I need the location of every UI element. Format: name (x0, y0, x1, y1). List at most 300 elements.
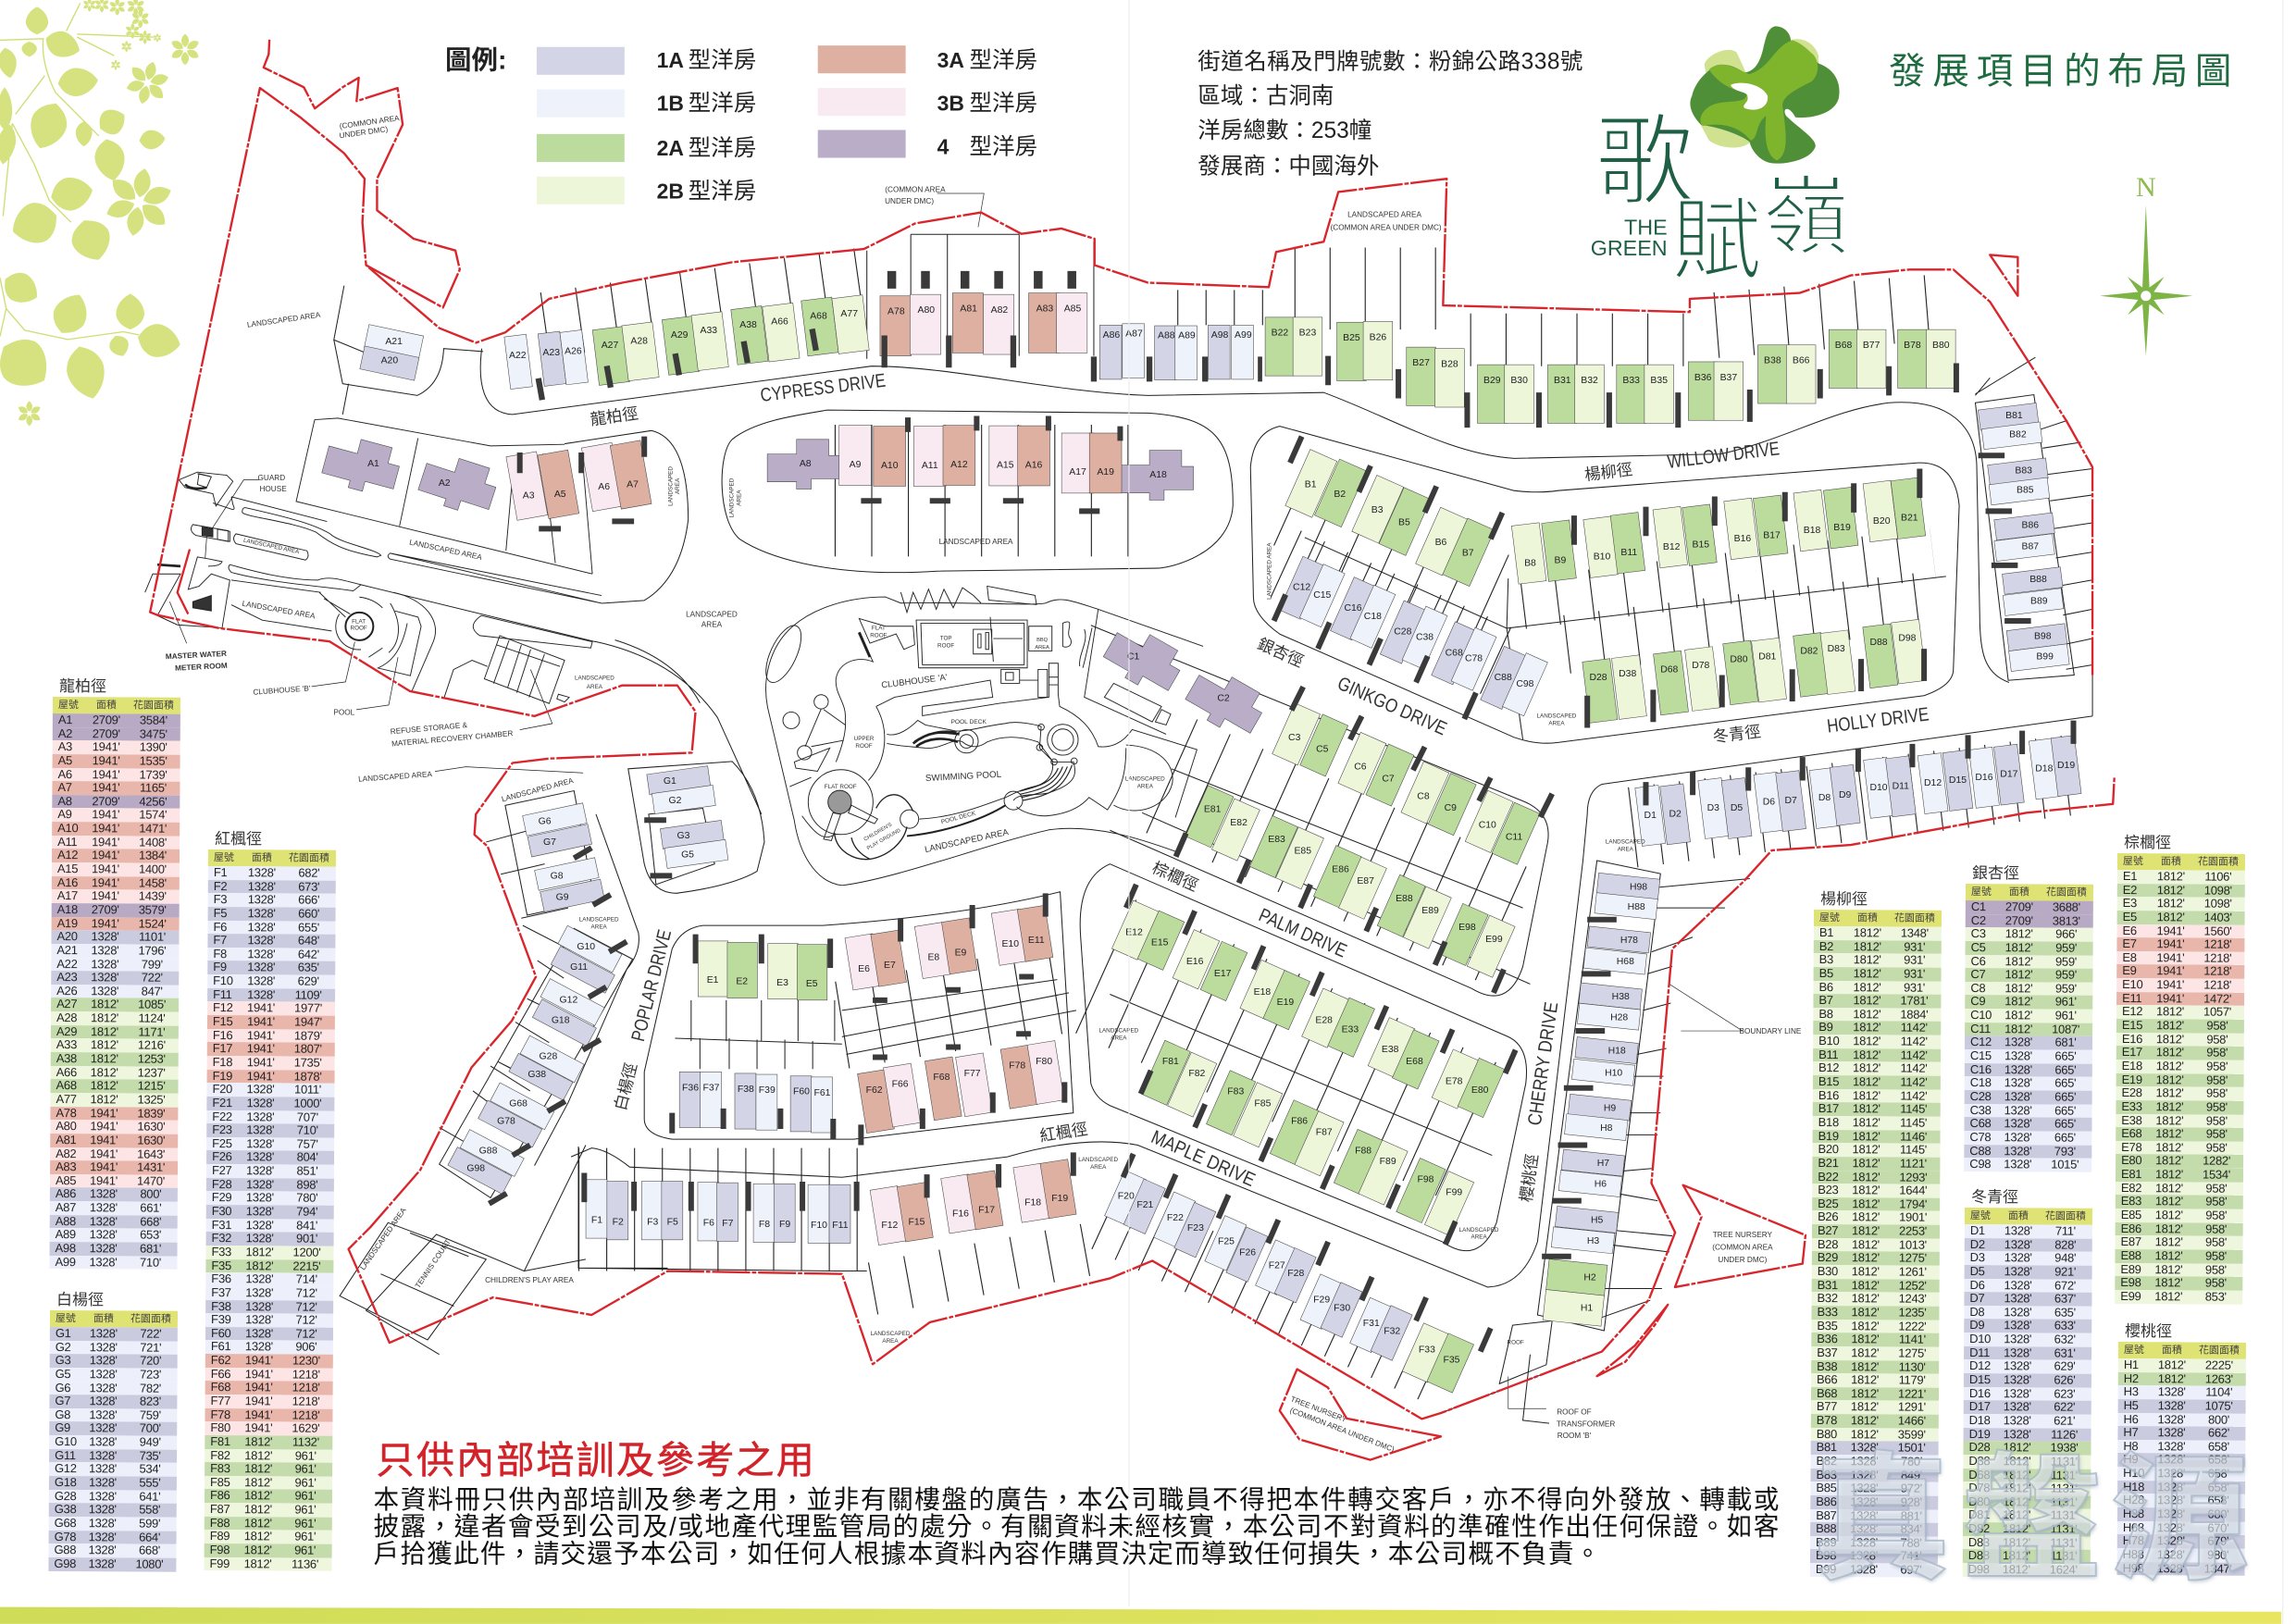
site plan text labels: AREA (591, 924, 608, 930)
table: 紅楓徑: 1328' (246, 1149, 274, 1164)
text: 紅楓徑 (215, 830, 262, 848)
table: 楊柳徑: B1 (1818, 925, 1833, 939)
table: 櫻桃徑: 1075' (2205, 1399, 2233, 1413)
table: 銀杏徑: 665' (2055, 1076, 2077, 1090)
house row: C12 to C98: C78 (1465, 654, 1483, 664)
site plan text labels: AREA (1618, 846, 1634, 852)
table: 棕櫚徑: 1812' (2157, 869, 2185, 884)
table: 龍柏徑: 1439' (138, 889, 166, 903)
page title: 發展項目的布局圖 (1889, 51, 2231, 92)
table: 冬青徑: D82 (1968, 1521, 1990, 1535)
house row: F20 to F35: F25 (1218, 1236, 1235, 1246)
house row: F12 to F19: F17 (978, 1205, 995, 1215)
site plan text labels: METER ROOM (175, 662, 228, 673)
house row: B1 to B7: B7 (1462, 549, 1474, 559)
table: 冬青徑: D16 (1969, 1385, 1991, 1399)
table: 棕櫚徑: 面積 (2161, 856, 2181, 868)
house row: F20 to F35: F22 (1167, 1213, 1184, 1223)
table: 紅楓徑: 1807' (294, 1042, 322, 1056)
table: 棕櫚徑: 1941' (2156, 991, 2184, 1005)
table: 紅楓徑: 1812' (244, 1543, 272, 1556)
house row: E81 to E99 (1185, 786, 1515, 977)
house row: B22 to B80: B27 (1412, 358, 1430, 368)
staircase blocks between house pairs (489, 279, 2073, 1352)
table: 白楊徑: 1328' (89, 1489, 117, 1503)
table: 櫻桃徑: H10 (2124, 1466, 2145, 1481)
table: 龍柏徑: 1812' (90, 1065, 118, 1079)
house row: D1 to D19: D5 (1731, 803, 1743, 813)
table: 楊柳徑: 1812' (1851, 1372, 1879, 1386)
table: 龍柏徑: 1839' (137, 1106, 165, 1120)
table: 楊柳徑: 1293' (1899, 1170, 1927, 1184)
table: 紅楓徑: 1200' (292, 1245, 320, 1258)
house row: E12 to E80 (1111, 900, 1505, 1118)
table: 龍柏徑: 1812' (90, 1092, 118, 1106)
development information (1198, 48, 1582, 180)
table: 冬青徑: 1131' (2050, 1535, 2077, 1549)
logo English name: THE (1624, 215, 1668, 239)
table: 棕櫚徑: E18 (2122, 1059, 2142, 1072)
house row: E6 to E11: E11 (1028, 936, 1045, 946)
table: 紅楓徑: 面積 (252, 852, 272, 863)
house row: F1 to F11: F6 (703, 1218, 714, 1228)
table: 紅楓徑: 1941' (247, 1041, 275, 1055)
table: 龍柏徑: A21 (56, 943, 77, 957)
table: 棕櫚徑: E7 (2122, 936, 2137, 951)
house row: A22 to A77: A22 (509, 351, 527, 361)
table: 銀杏徑: 959' (2055, 968, 2077, 982)
house row: F20 to F35 (1105, 1171, 1474, 1393)
table: 紅楓徑: F66 (211, 1366, 230, 1381)
house row: A78 to A99: A78 (887, 307, 905, 317)
table: 紅楓徑: 780' (296, 1191, 317, 1205)
table: 龍柏徑: 1812' (90, 1051, 118, 1065)
table: 楊柳徑: 1812' (1851, 1291, 1879, 1305)
table: 冬青徑: 1328' (2004, 1305, 2031, 1319)
site plan text labels: POOL DECK (940, 810, 977, 825)
compass north arrow: N (2136, 171, 2156, 203)
house row: E6 to E11: E7 (884, 961, 896, 971)
table: 銀杏徑: 1812' (2005, 941, 2033, 955)
table: 楊柳徑: 1145' (1900, 1115, 1927, 1129)
site plan text labels: (COMMON AREA (1712, 1244, 1773, 1252)
table: 紅楓徑: 1879' (294, 1028, 322, 1042)
table: 楊柳徑: 1328' (1850, 1521, 1878, 1535)
table: 銀杏徑: 3813' (2053, 914, 2080, 928)
table: 銀杏徑: C8 (1971, 981, 1986, 995)
table: 紅楓徑: 1941' (245, 1380, 273, 1394)
table: 棕櫚徑: 1812' (2156, 1059, 2184, 1073)
table: 櫻桃徑: 1328' (2158, 1467, 2186, 1481)
table: 紅楓徑: 898' (296, 1177, 317, 1191)
table: 紅楓徑: 1941' (244, 1420, 272, 1434)
table: 棕櫚徑: 1812' (2154, 1276, 2182, 1290)
table: 楊柳徑: 1142' (1900, 1021, 1927, 1035)
table: 棕櫚徑: 1941' (2156, 964, 2184, 978)
table: 紅楓徑: 666' (298, 893, 319, 907)
table: 櫻桃徑: 1328' (2157, 1520, 2185, 1534)
table: 楊柳徑: 1235' (1898, 1305, 1926, 1319)
table: 楊柳徑: B30 (1817, 1264, 1838, 1278)
table: 紅楓徑: 1328' (245, 1298, 273, 1313)
site plan text labels: LANDSCAPED (871, 1331, 911, 1337)
table: 龍柏徑: A22 (56, 956, 77, 970)
table: 冬青徑: 1812' (2003, 1494, 2030, 1508)
table: 冬青徑: 1812' (2003, 1548, 2030, 1562)
house row: F1 to F11: F1 (591, 1216, 602, 1226)
site plan text labels: LANDSCAPED (1098, 1028, 1139, 1035)
house row: F1 to F11: F10 (811, 1221, 827, 1231)
table: 楊柳徑: 3599' (1897, 1427, 1925, 1441)
table: 龍柏徑: 1384' (139, 849, 167, 862)
table: 楊柳徑: 1901' (1899, 1210, 1927, 1224)
site plan text labels: FLAT (872, 626, 886, 632)
table: 棕櫚徑: 1812' (2155, 1168, 2183, 1182)
table: 櫻桃徑: H3 (2124, 1385, 2139, 1399)
table: 棕櫚徑: 958' (2206, 1127, 2228, 1141)
table: 楊柳徑: 1812' (1853, 966, 1880, 980)
table: 龍柏徑: 710' (140, 1255, 161, 1269)
table: 白楊徑: 1328' (90, 1339, 118, 1354)
table: 棕櫚徑: 1812' (2157, 883, 2185, 897)
table: 楊柳徑: 1812' (1850, 1399, 1878, 1413)
table: 銀杏徑: 2709' (2005, 913, 2033, 927)
compass north arrow (2100, 171, 2192, 356)
house row: B8 to B21: B17 (1763, 531, 1781, 541)
table: 紅楓徑: 794' (296, 1204, 317, 1218)
table: 龍柏徑: A15 (56, 862, 78, 875)
table: 紅楓徑: 1230' (292, 1353, 320, 1367)
house row: F1 to F11: F7 (722, 1219, 734, 1229)
house row: F1 to F11: F8 (759, 1220, 770, 1230)
table: 楊柳徑: B33 (1817, 1305, 1837, 1319)
table: 棕櫚徑: 958' (2206, 1141, 2228, 1155)
table: 楊柳徑: B5 (1818, 966, 1832, 980)
table: 紅楓徑: F21 (212, 1096, 232, 1110)
house column: G1 to G98: G38 (527, 1070, 546, 1080)
house row: A3 to A7: A3 (523, 491, 535, 502)
table: 白楊徑: 1328' (88, 1556, 116, 1570)
table: 紅楓徑: F18 (213, 1055, 232, 1069)
site plan text labels: AREA (675, 477, 681, 494)
table: 紅楓徑: 1011' (294, 1082, 321, 1097)
house row: A9 to A19: A16 (1025, 460, 1043, 470)
table: 楊柳徑: 931' (1903, 980, 1925, 994)
table: 棕櫚徑: E80 (2121, 1154, 2141, 1168)
table: 櫻桃徑: 1812' (2158, 1371, 2186, 1385)
table: 紅楓徑: 712' (296, 1285, 317, 1299)
house row: E81 to E99: E85 (1294, 847, 1311, 857)
table: 櫻桃徑: 1328' (2158, 1398, 2186, 1413)
table: 紅楓徑: 660' (298, 906, 319, 920)
table: 紅楓徑: 710' (297, 1122, 318, 1137)
table: 龍柏徑: 1941' (92, 807, 119, 822)
table: 紅楓徑: 1947' (294, 1014, 322, 1028)
table: 紅楓徑: F8 (213, 947, 227, 961)
house row: B8 to B21: B15 (1693, 540, 1709, 551)
table: 冬青徑: D6 (1969, 1277, 1984, 1291)
table: 紅楓徑: F80 (210, 1420, 230, 1434)
table: 楊柳徑: 1884' (1900, 1007, 1928, 1021)
site plan text labels: LANDSCAPED AREA (1347, 210, 1422, 218)
table: 櫻桃徑: H8 (2124, 1439, 2139, 1453)
house column: B81 to B99: B88 (2029, 575, 2047, 585)
legend: 型洋房 (689, 135, 756, 161)
table: 龍柏徑: 1812' (91, 1010, 118, 1024)
table: 冬青徑: 1328' (2004, 1372, 2031, 1386)
table: 楊柳徑: 849' (1900, 1468, 1922, 1481)
table: 龍柏徑: 1941' (91, 888, 118, 902)
house row: F1 to F11: F5 (667, 1217, 678, 1227)
house row: B22 to B80 (1265, 317, 1955, 423)
house row: F12 to F19: F15 (909, 1217, 925, 1227)
table: 楊柳徑: 1328' (1850, 1440, 1878, 1454)
table: 楊柳徑: 1243' (1898, 1291, 1926, 1306)
table: 棕櫚徑: 958' (2206, 1100, 2228, 1114)
table: 楊柳徑: 1812' (1853, 1048, 1880, 1061)
table: 龍柏徑: A87 (55, 1200, 76, 1214)
table: 楊柳徑: B6 (1818, 979, 1832, 993)
site plan text labels: LANDSCAPED AREA (408, 538, 483, 562)
table: 白楊徑: 949' (139, 1434, 161, 1448)
table: 紅楓徑: F9 (213, 960, 227, 973)
house row: F20 to F35: F30 (1334, 1304, 1350, 1314)
house row: D1 to D19: D1 (1644, 811, 1657, 821)
table: 銀杏徑: 681' (2055, 1035, 2077, 1049)
house row: F20 to F35: F32 (1384, 1327, 1400, 1337)
table: 銀杏徑: C98 (1970, 1158, 1992, 1172)
table: 銀杏徑: 面積 (2009, 887, 2029, 899)
table: 棕櫚徑: E6 (2122, 924, 2137, 937)
table: 棕櫚徑: 1812' (2155, 1127, 2183, 1141)
table: 龍柏徑: 653' (140, 1228, 161, 1242)
table: 冬青徑: 1624' (2050, 1562, 2078, 1576)
table: 紅楓徑: 2215' (292, 1258, 320, 1272)
table: 楊柳徑: 931' (1904, 952, 1925, 967)
table: 白楊徑: G38 (55, 1502, 76, 1516)
table: 紅楓徑: 1812' (244, 1475, 272, 1489)
table: 銀杏徑: 1812' (2005, 1009, 2033, 1023)
table: 紅楓徑: 1629' (292, 1420, 319, 1435)
house row: C3 to C11: C7 (1382, 774, 1395, 784)
table: 紅楓徑: F82 (210, 1447, 230, 1461)
table: 白楊徑: G7 (55, 1394, 70, 1407)
text: 冬青徑 (1971, 1188, 2018, 1206)
table: 龍柏徑: 1471' (139, 821, 167, 836)
table: 紅楓徑: F81 (210, 1434, 230, 1448)
house row: D1 to D19: D16 (1975, 773, 1993, 783)
table: 龍柏徑: A83 (56, 1159, 76, 1173)
table: 棕櫚徑: 958' (2205, 1235, 2227, 1249)
table: 棕櫚徑: 1812' (2155, 1140, 2183, 1154)
house row: B8 to B21: B11 (1620, 548, 1637, 558)
table: 棕櫚徑: E33 (2121, 1099, 2142, 1113)
table: 冬青徑 (1962, 1188, 2092, 1578)
table: 楊柳徑: 1812' (1853, 938, 1880, 953)
house row: F36 to F61: F38 (738, 1085, 754, 1095)
table: 櫻桃徑: 670' (2208, 1521, 2229, 1535)
table: 楊柳徑: 1812' (1853, 1020, 1880, 1034)
table: 楊柳徑: 1812' (1853, 979, 1880, 994)
site plan text labels: LANDSCAPED (729, 477, 736, 518)
property plot dividers (440, 279, 2092, 1373)
table: 龍柏徑: 2709' (92, 726, 119, 740)
table: 紅楓徑: F12 (213, 1000, 233, 1014)
table: 櫻桃徑: 1263' (2205, 1371, 2233, 1386)
site plan text labels: MATERIAL RECOVERY CHAMBER (391, 729, 514, 748)
table: 棕櫚徑: 1812' (2156, 1086, 2184, 1100)
table: 白楊徑: G9 (55, 1420, 70, 1434)
table: 銀杏徑: 959' (2055, 941, 2078, 955)
house row: D1 to D19: D18 (2035, 763, 2054, 774)
table: 櫻桃徑: 1328' (2157, 1494, 2185, 1507)
table: 棕櫚徑: 1057' (2203, 1005, 2231, 1019)
house row: E1 to E5 (698, 941, 827, 1000)
table: 龍柏徑: 1400' (139, 862, 167, 875)
table: 銀杏徑: 1015' (2052, 1158, 2079, 1172)
table: 棕櫚徑: E11 (2122, 991, 2141, 1005)
table: 銀杏徑: C10 (1971, 1009, 1992, 1023)
table: 龍柏徑: 1085' (138, 998, 166, 1011)
house row: B22 to B80: B68 (1835, 341, 1853, 351)
entrance road, guard house, clubhouse B and refuse chamber (145, 418, 602, 773)
table: 冬青徑: 633' (2054, 1319, 2076, 1333)
table: 白楊徑: 花園面積 (130, 1313, 171, 1324)
table: 棕櫚徑: 958' (2205, 1221, 2227, 1236)
table: 冬青徑: 1328' (2004, 1345, 2031, 1359)
house group: A20 A21 (360, 325, 424, 380)
table: 冬青徑: 1328' (2004, 1223, 2032, 1237)
house row: B8 to B21 (1511, 477, 1926, 584)
table: 棕櫚徑: 1941' (2157, 924, 2185, 937)
logo flower (1690, 26, 1840, 164)
site plan text labels: TOP (940, 636, 952, 642)
table: 棕櫚徑: 1534' (2203, 1168, 2230, 1182)
table: 冬青徑: 1328' (2004, 1358, 2031, 1372)
site plan text labels: (COMMON AREA UNDER DMC) (1331, 224, 1442, 232)
table: 冬青徑: 626' (2054, 1372, 2075, 1386)
house row: B8 to B21: B12 (1663, 542, 1681, 552)
house row: E81 to E99: E99 (1485, 935, 1503, 945)
table: 冬青徑: 1328' (2004, 1332, 2031, 1345)
site plan text labels: FLAT (352, 618, 366, 625)
table: 龍柏徑: 1253' (137, 1051, 165, 1065)
table: 紅楓徑: F16 (213, 1027, 232, 1042)
table: 紅楓徑: 1328' (248, 892, 276, 906)
large houses type 4: C2 (1217, 693, 1230, 703)
table: 龍柏徑: 1215' (137, 1079, 165, 1093)
table: 櫻桃徑: H98 (2123, 1561, 2144, 1575)
table: 楊柳徑: B80 (1816, 1426, 1837, 1440)
table: 棕櫚徑: E12 (2122, 1005, 2142, 1019)
table: 楊柳徑: 881' (1900, 1508, 1921, 1522)
table: 銀杏徑: 1812' (2004, 1022, 2032, 1036)
table: 龍柏徑: 1941' (90, 1173, 118, 1187)
large houses type 4: A8 (800, 459, 812, 469)
table: 龍柏徑: 1171' (138, 1024, 165, 1038)
site plan text labels: LANDSCAPED (1125, 775, 1165, 782)
table: 龍柏徑: A33 (56, 1037, 77, 1051)
table: 龍柏徑: 1390' (139, 740, 167, 754)
table: 紅楓徑: 1218' (292, 1381, 320, 1395)
table: 銀杏徑: C88 (1970, 1144, 1992, 1158)
table: 楊柳徑: 1812' (1852, 1115, 1880, 1129)
table: 龍柏徑: A86 (55, 1186, 76, 1200)
table: 龍柏徑: 1812' (90, 1037, 118, 1051)
table: 棕櫚徑: E38 (2121, 1113, 2142, 1127)
table: 冬青徑: 1812' (2003, 1454, 2030, 1468)
table: 紅楓徑: F77 (211, 1394, 230, 1407)
house row: B22 to B80: B78 (1904, 341, 1921, 351)
site plan text labels: TREE NURSERY (1289, 1395, 1348, 1424)
table: 龍柏徑: A81 (56, 1133, 76, 1147)
table: 龍柏徑: 1328' (90, 1186, 117, 1201)
table: 龍柏徑: 1941' (92, 862, 119, 875)
house row: B22 to B80: B30 (1510, 376, 1528, 386)
house row: A78 to A99: A89 (1178, 331, 1196, 341)
house column: H1 to H98: H9 (1604, 1103, 1616, 1113)
legend: 4 (937, 134, 949, 158)
table: 紅楓徑: 1328' (247, 933, 275, 947)
table: 楊柳徑: B78 (1816, 1413, 1837, 1427)
site plan text labels: FLAT ROOF (825, 784, 857, 790)
site plan text labels: ROOF (351, 626, 367, 632)
house row: F20 to F35: F29 (1313, 1295, 1330, 1306)
house row: F81 to F99: F89 (1380, 1157, 1396, 1167)
house row: A78 to A99: A81 (960, 304, 977, 314)
table: 楊柳徑: 1252' (1898, 1278, 1926, 1292)
site plan text labels: UNDER DMC) (1718, 1256, 1768, 1264)
table: 白楊徑: 668' (139, 1543, 160, 1557)
table: 紅楓徑: 1328' (246, 1218, 274, 1232)
table: 白楊徑: 1328' (89, 1475, 117, 1489)
table: 龍柏徑: A77 (56, 1092, 76, 1106)
table: 冬青徑: D2 (1970, 1236, 1985, 1250)
site plan text labels: (COMMON AREA (885, 185, 946, 193)
table: 棕櫚徑: 1472' (2203, 991, 2231, 1006)
table: 棕櫚徑: E2 (2123, 883, 2137, 897)
site plan text labels: 楊柳徑 (1583, 460, 1633, 484)
house row: B22 to B80: B25 (1343, 333, 1360, 343)
site plan text labels: LANDSCAPED AREA (246, 311, 321, 329)
table: 冬青徑: 711' (2055, 1223, 2076, 1237)
table: 龍柏徑: A17 (56, 888, 78, 902)
table: 冬青徑: 1328' (2004, 1318, 2031, 1332)
table: 龍柏徑: 1643' (137, 1147, 165, 1160)
table: 棕櫚徑: 1812' (2155, 1113, 2183, 1127)
house row: B22 to B80: B29 (1483, 376, 1501, 386)
house row: F20 to F35: F21 (1136, 1200, 1154, 1210)
site plan text labels: AREA (737, 490, 743, 506)
table: 龍柏徑: 1124' (138, 1010, 165, 1024)
table: 棕櫚徑: 1812' (2156, 1005, 2184, 1019)
table: 楊柳徑: 1812' (1851, 1345, 1879, 1359)
table: 棕櫚徑: 1812' (2155, 1221, 2183, 1235)
table: 銀杏徑: 1328' (2004, 1049, 2032, 1063)
site plan text labels: ROOM 'B' (1558, 1432, 1592, 1440)
house row: B1 to B7 (1285, 450, 1495, 587)
table: 楊柳徑: 1812' (1852, 1209, 1880, 1223)
table: 龍柏徑: 1941' (92, 821, 119, 835)
table: 白楊徑: 823' (140, 1394, 161, 1407)
table: 龍柏徑: 1941' (92, 766, 119, 781)
table: 棕櫚徑: 1941' (2156, 978, 2184, 992)
house row: D28 to D98: D88 (1869, 638, 1888, 648)
house row: C3 to C11: C9 (1445, 803, 1457, 813)
table: 冬青徑: 672' (2054, 1278, 2076, 1292)
table: 銀杏徑: 665' (2054, 1117, 2076, 1131)
site plan text labels: LANDSCAPED (1459, 1227, 1499, 1233)
